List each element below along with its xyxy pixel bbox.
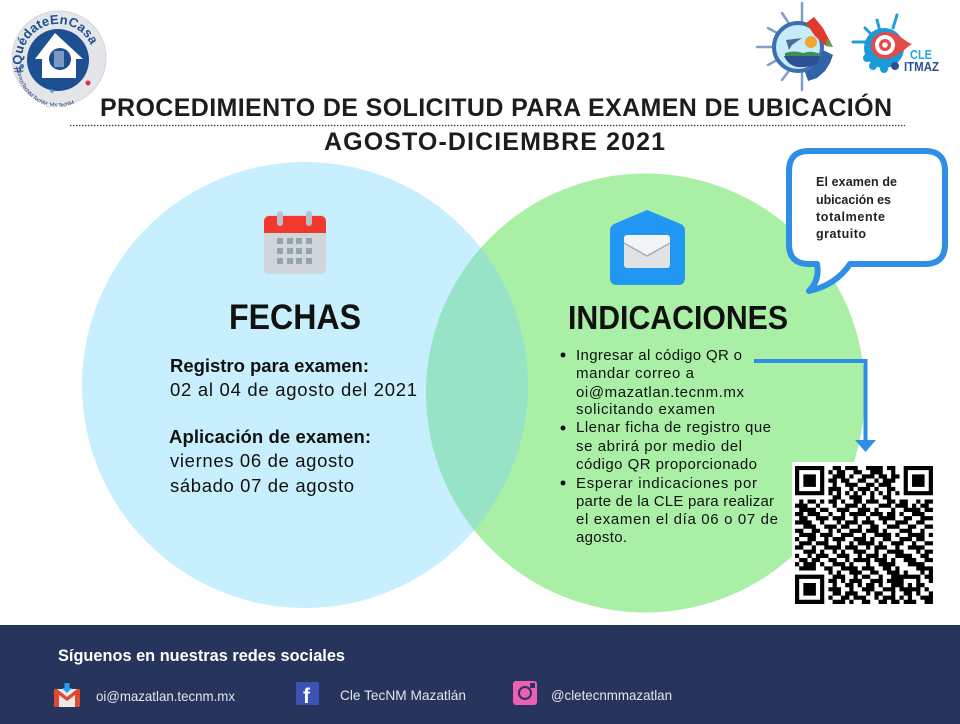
panel: fechas xyxy=(169,298,417,496)
bullet list: agosto. xyxy=(576,529,627,546)
arrow to QR xyxy=(754,361,876,452)
callout: examen gratuito: totalmente xyxy=(816,210,885,224)
title xyxy=(100,92,892,156)
icon: mail xyxy=(54,683,80,707)
bullet list: se abrirá por medio del xyxy=(576,438,742,455)
icon: facebook: f xyxy=(303,685,311,708)
text block: aplicacion: viernes 06 de agosto xyxy=(170,450,354,471)
icon: envelope xyxy=(610,210,685,285)
bullet list: Llenar ficha de registro que xyxy=(576,419,771,436)
title: PROCEDIMIENTO DE SOLICITUD PARA EXAMEN DE UBICACIÓN xyxy=(100,92,892,122)
callout: examen gratuito xyxy=(789,151,945,291)
QR code xyxy=(792,462,937,608)
icon: calendar xyxy=(264,211,326,274)
logo: CLE ITMAZ: ITMAZ xyxy=(904,59,939,74)
footer heading: Síguenos en nuestras redes sociales xyxy=(58,646,345,665)
callout: examen gratuito: El examen de xyxy=(816,175,897,189)
text block: registro xyxy=(170,355,417,400)
text: facebook name: Cle TecNM Mazatlán xyxy=(340,687,466,703)
logo: CLE ITMAZ xyxy=(853,15,939,74)
bullet list xyxy=(560,347,778,546)
bullet list: código QR proporcionado xyxy=(576,456,757,473)
icon: instagram xyxy=(513,681,537,705)
text block: aplicacion: sábado 07 de agosto xyxy=(170,475,354,496)
bullet list: el examen el día 06 o 07 de xyxy=(576,511,778,528)
bullet list: Ingresar al código QR o xyxy=(576,347,742,364)
callout: examen gratuito: gratuito xyxy=(816,227,866,241)
text: email: oi@mazatlan.tecnm.mx xyxy=(96,688,235,704)
icon: facebook xyxy=(296,682,319,708)
venn diagram circles xyxy=(82,162,865,612)
text block: registro: 02 al 04 de agosto del 2021 xyxy=(170,379,417,400)
heading: indicaciones: INDICACIONES xyxy=(568,299,788,336)
logo: institute emblem xyxy=(757,3,833,90)
badge: Quédate en casa xyxy=(12,10,106,108)
badge: Quédate en casa: SomosTecNM TecNM_MX TecNM xyxy=(17,69,74,108)
bullet list: solicitando examen xyxy=(576,401,715,418)
text block: registro: Registro para examen: xyxy=(170,355,369,376)
bullet list: mandar correo a xyxy=(576,365,695,382)
badge: Quédate en casa: #QuédateEnCasa xyxy=(12,14,96,74)
text block: aplicacion xyxy=(169,426,371,496)
footer band xyxy=(0,625,960,724)
text: instagram handle: @cletecnmmazatlan xyxy=(551,687,672,703)
text block: aplicacion: Aplicación de examen: xyxy=(169,426,371,447)
bullet list: Esperar indicaciones por xyxy=(576,475,757,492)
bullet list: parte de la CLE para realizar xyxy=(576,493,774,510)
title: AGOSTO-DICIEMBRE 2021 xyxy=(324,128,665,156)
panel: indicaciones xyxy=(560,299,788,546)
logo: CLE ITMAZ: CLE xyxy=(910,47,932,62)
callout: examen gratuito: ubicación es xyxy=(816,193,891,207)
heading: fechas: FECHAS xyxy=(229,298,361,337)
bullet list: oi@mazatlan.tecnm.mx xyxy=(576,384,744,401)
